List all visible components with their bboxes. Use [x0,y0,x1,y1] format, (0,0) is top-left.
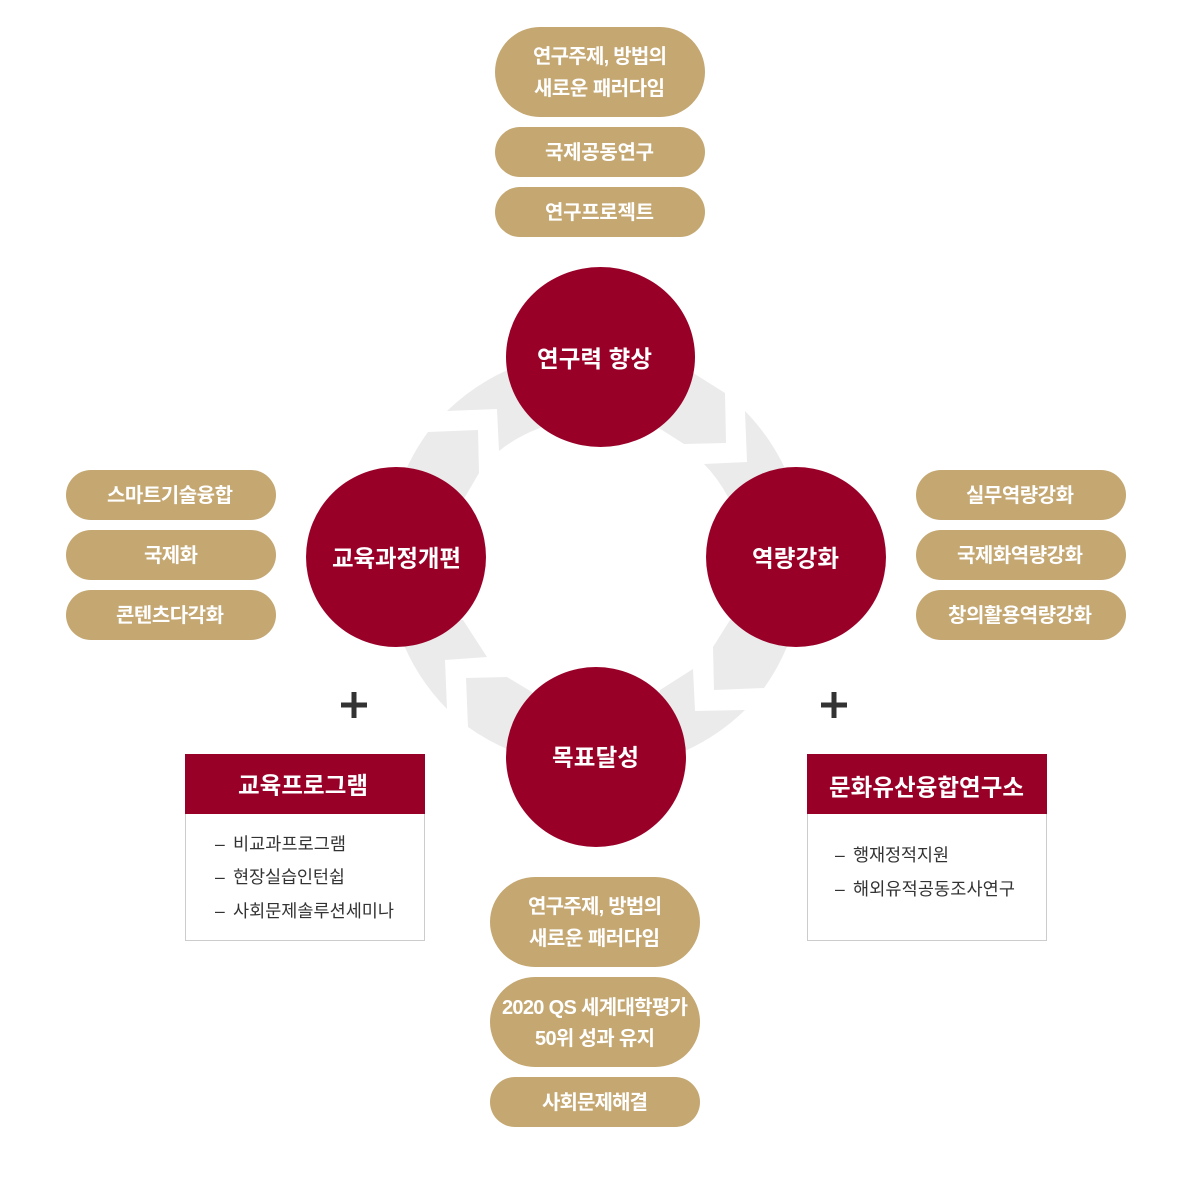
list: education program items: – [215,901,225,921]
left pills [66,470,276,640]
pill: contents diversification: 콘텐츠다각화 [116,604,224,627]
circle: research: 연구력 향상 [537,346,652,372]
circle: curriculum: 교육과정개편 [332,546,461,572]
pill: social problems [490,1077,700,1127]
pill: new paradigm: 연구주제, 방법의 [533,45,667,68]
pill: QS ranking: 2020 QS 세계대학평가 [502,996,688,1019]
pill: social problems: 사회문제해결 [542,1091,648,1114]
list: institute items: – [835,879,845,899]
pill: practical capability [916,470,1126,520]
pill: practical capability: 실무역량강화 [966,484,1074,507]
circle: capability: 역량강화 [752,546,839,572]
pill: international capability [916,530,1126,580]
pill: internationalization: 국제화 [144,544,198,567]
panel: cultural heritage institute [807,754,1047,940]
icon: plus left [341,692,367,718]
pill: new paradigm: 새로운 패러다임 [534,77,665,100]
circle: capability [706,467,886,647]
pill: contents diversification [66,590,276,640]
panel: education program [185,754,425,940]
pill: joint research: 국제공동연구 [545,141,654,164]
pill: new paradigm [490,877,700,967]
list: education program items: 현장실습인턴쉽 [233,867,345,887]
pill: internationalization [66,530,276,580]
list: education program items [215,834,394,921]
top pills [495,27,705,237]
list: institute items [835,845,1015,899]
pill: research project: 연구프로젝트 [545,201,654,224]
panel: education program: 교육프로그램 [238,772,368,798]
list: education program items: 비교과프로그램 [233,834,346,854]
list: education program items: 사회문제솔루션세미나 [233,901,394,921]
pill: research project [495,187,705,237]
bottom pills [490,877,700,1127]
circle: research [506,267,695,447]
circle: curriculum [306,467,486,647]
cycle ring arrows [395,365,796,760]
pill: international capability: 국제화역량강화 [957,544,1083,567]
list: education program items: – [215,834,225,854]
right pills [916,470,1126,640]
pill: creative capability: 창의활용역량강화 [948,604,1092,627]
panel: cultural heritage institute: 문화유산융합연구소 [829,774,1024,800]
pill: QS ranking: 50위 성과 유지 [535,1027,655,1050]
icon: plus right [821,692,847,718]
list: education program items: – [215,867,225,887]
pill: smart tech [66,470,276,520]
pill: QS ranking [490,977,700,1067]
pill: new paradigm [495,27,705,117]
pill: joint research [495,127,705,177]
pill: smart tech: 스마트기술융합 [107,484,233,507]
pill: new paradigm: 연구주제, 방법의 [528,895,662,918]
list: institute items: – [835,845,845,865]
list: institute items: 행재정적지원 [853,845,949,865]
pill: creative capability [916,590,1126,640]
circle: goal: 목표달성 [552,744,639,770]
list: institute items: 해외유적공동조사연구 [853,879,1015,899]
pill: new paradigm: 새로운 패러다임 [529,927,660,950]
circle: goal [506,667,686,847]
